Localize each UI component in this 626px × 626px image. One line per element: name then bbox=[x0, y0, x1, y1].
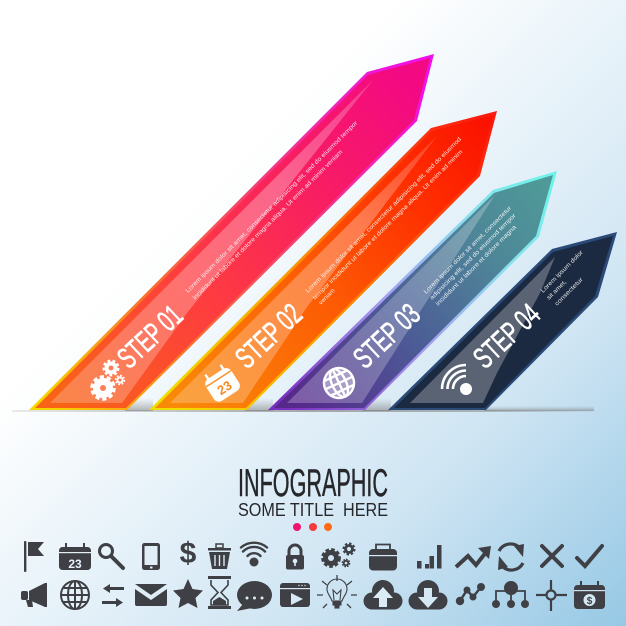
label: step 01: STEP 01 bbox=[111, 299, 189, 375]
text block: step 04: sit amet, bbox=[546, 279, 568, 301]
arrow: step 03 bbox=[268, 171, 557, 410]
icon: video window bbox=[280, 583, 310, 607]
icon: gears bbox=[322, 544, 354, 567]
ground shadow bbox=[12, 398, 602, 412]
dots bbox=[293, 523, 332, 531]
icon: wifi small bbox=[241, 543, 267, 566]
icon: phone bbox=[142, 543, 160, 570]
icon: mail bbox=[135, 584, 167, 606]
icon: calendar: 23 bbox=[214, 378, 235, 398]
label: step 02: STEP 02 bbox=[229, 298, 309, 375]
icon: sync bbox=[498, 544, 524, 570]
icon: lock bbox=[286, 545, 304, 570]
subtitle: SOME TITLE HERE bbox=[238, 500, 388, 520]
highlight: step 03 bbox=[287, 195, 495, 403]
icon: briefcase bbox=[369, 544, 397, 570]
text block: step 03: incididunt ut labore et dolore magna bbox=[435, 224, 518, 307]
icon: wifi bbox=[442, 365, 472, 395]
icon: calendar 23 bbox=[59, 543, 91, 571]
text block: step 01: incididunt ut labore et dolore magna aliqua. Ut enim ad minim veniam bbox=[192, 149, 344, 301]
icon: trash bbox=[208, 544, 231, 569]
icon: light bulb bbox=[317, 575, 357, 608]
text block: step 02: tempor incididunt ut labore et dolore magna aliqua. Ut enim ad minim bbox=[312, 149, 464, 301]
icon: calendar dollar: $ bbox=[587, 596, 593, 607]
icon: gears bbox=[92, 361, 124, 399]
icon: crosshair bbox=[536, 580, 567, 611]
icon: cross bbox=[542, 546, 562, 566]
text block: step 04 bbox=[540, 250, 585, 307]
label: step 04: STEP 04 bbox=[467, 298, 547, 375]
text block: step 03: Lorem ipsum dolor sit amet, consectetur bbox=[423, 206, 513, 295]
text block: step 04: Lorem ipsum dolor bbox=[540, 250, 585, 294]
label: step 03: STEP 03 bbox=[347, 298, 427, 375]
icon: line nodes bbox=[456, 583, 485, 605]
icon: globe bbox=[319, 363, 359, 403]
icon: calendar dollar bbox=[574, 581, 605, 609]
highlight: step 04 bbox=[410, 257, 555, 403]
icon: calendar bbox=[200, 362, 242, 404]
text block: step 01: Lorem ipsum dolor sit amet, consectetur adipisicing elit, sed do eiusmod tempor bbox=[185, 120, 359, 294]
text block: step 03: adipisicing elit, sed do eiusmod tempor bbox=[429, 213, 518, 301]
text block: step 04: consectetur bbox=[554, 277, 585, 307]
icon: trend arrow bbox=[456, 546, 491, 567]
icon: check bbox=[577, 546, 602, 566]
icon: hourglass bbox=[208, 576, 231, 609]
icon: swap arrows bbox=[102, 584, 124, 607]
text block: step 02: veniam bbox=[318, 288, 337, 306]
highlight: step 01 bbox=[50, 80, 373, 403]
text block: step 02: Lorem ipsum dolor sit amet, consectetur adipisicing elit, sed do eiusmod bbox=[305, 137, 463, 294]
title: INFOGRAPHIC bbox=[238, 462, 388, 505]
icon: cloud download bbox=[408, 580, 448, 610]
arrow: step 02 bbox=[149, 111, 497, 410]
icon: megaphone bbox=[21, 583, 47, 607]
text block: step 03 bbox=[423, 206, 518, 307]
icon set bbox=[21, 537, 605, 611]
icon: signal bars bbox=[417, 545, 442, 568]
icon: calendar 23: 23 bbox=[68, 557, 82, 571]
icon: dollar: $ bbox=[180, 537, 197, 570]
icon: cloud upload bbox=[364, 580, 402, 610]
icon: flag bbox=[24, 541, 44, 572]
icon: hierarchy bbox=[492, 581, 529, 608]
arrow: step 01 bbox=[29, 54, 434, 410]
highlight: step 02 bbox=[170, 136, 437, 403]
icon: star bbox=[173, 579, 203, 608]
icon: chat bubble bbox=[237, 581, 272, 611]
icon: search bbox=[100, 544, 123, 568]
icon: globe bbox=[61, 581, 89, 609]
arrow: step 04 bbox=[388, 232, 617, 410]
